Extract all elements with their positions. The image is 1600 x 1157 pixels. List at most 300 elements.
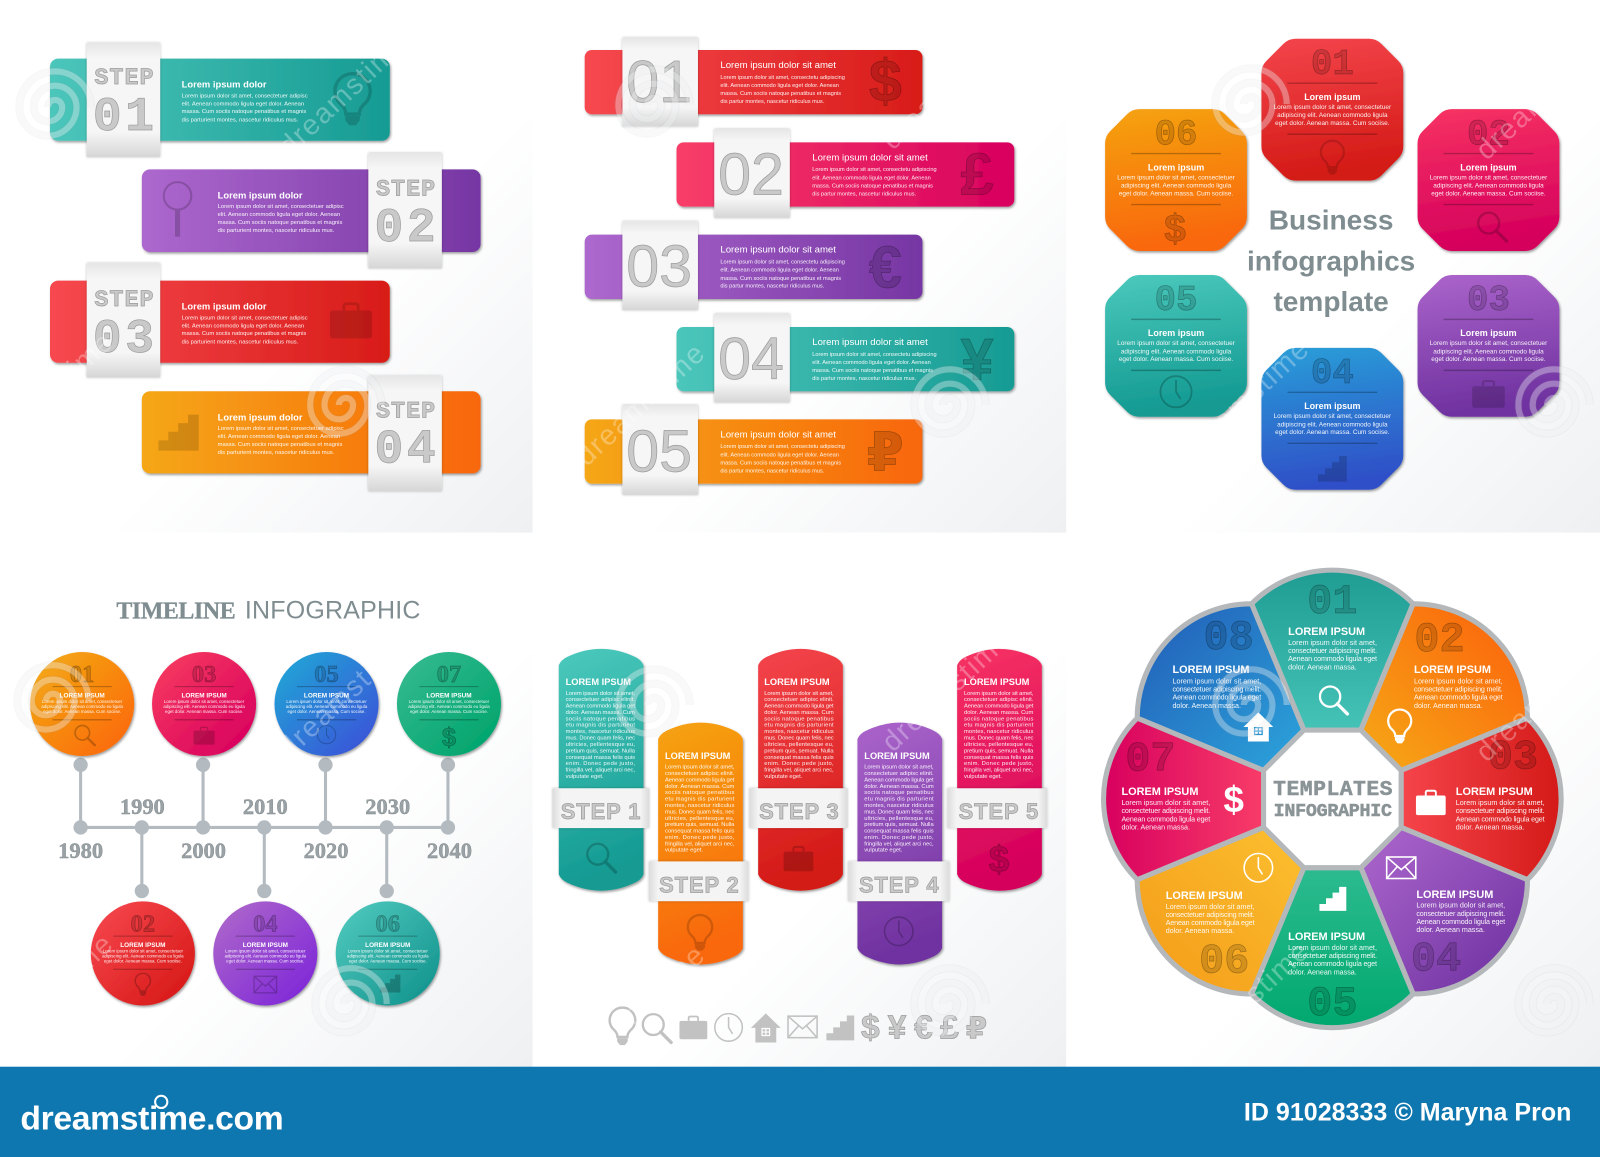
body text: etu magnis dis parturient (764, 723, 834, 729)
body text: Lorem ipsum dolor sit amet, (665, 765, 735, 771)
icon: bulb (688, 915, 712, 951)
year labels: 2030 (365, 794, 410, 819)
icon: house (1244, 712, 1273, 742)
body text: adipiscing elit. Aenean commodo eu ligula (102, 954, 184, 959)
circle 07 (397, 652, 501, 756)
body text: Lorem ipsum dolor sit amet, (864, 765, 934, 771)
body text: Lorem ipsum dolor sit amet, (1414, 677, 1503, 685)
body text: sociis natoque penatibus (665, 790, 734, 796)
body text: dolor. Aenean massa. (1416, 926, 1485, 934)
title: Lorem ipsum dolor (182, 302, 267, 312)
watermark overlay: dreamstime (876, 21, 1017, 156)
band: step 04: STEP (376, 398, 435, 425)
octagon 01 (1261, 39, 1403, 181)
icon set row: € (914, 1010, 933, 1047)
body text: consequat massa felis quis (566, 755, 635, 761)
body text: eget dolor. Aenean massa. Cum sociise. (1431, 356, 1546, 363)
icon: clock (1244, 854, 1273, 882)
icon: magnifier (1478, 213, 1507, 241)
body text: mus. Donec quam felis, nec (665, 809, 734, 815)
body text: consectetuer adipisc elinit. (764, 697, 834, 703)
body text: adipiscing elit. Aenean commodo eu ligula (41, 704, 123, 709)
circle 01 (30, 652, 134, 756)
icon: stairs (380, 975, 400, 993)
body text: dolor. Aenean massa. (1288, 968, 1357, 976)
body text: Lorem ipsum dolor sit amet, consectetuer (1430, 174, 1548, 181)
banner: step 04 (142, 376, 481, 491)
wedge 05 (1252, 868, 1413, 1028)
icon: bulb (1388, 710, 1411, 743)
body text: consectetuer adipisc elinit. (665, 771, 735, 777)
body text: vulputate eget. (864, 848, 903, 854)
heading: timeline infographic (116, 596, 420, 624)
body text: massa. Cum sociis natoque penatibus et magnis (720, 461, 841, 467)
column step 2 (649, 723, 749, 964)
body text: Lorem ipsum dolor sit amet, consectetuer (409, 699, 490, 704)
body text: montes, nascetur ridiculus (864, 803, 934, 809)
number 04: 04 (253, 911, 278, 938)
band: step 03: STEP (94, 287, 154, 314)
center heading: templates infographic: INFOGRAPHIC (1274, 801, 1392, 822)
body text: dolor. Aenean massa. Cum (964, 710, 1034, 716)
body text: vulputate eget. (665, 848, 703, 854)
body text: Lorem ipsum dolor sit amet, (1416, 902, 1505, 910)
body text: adipiscing elit. Aenean commodo eu ligula (225, 954, 307, 959)
number 03: 03 (1467, 280, 1510, 321)
body text: dolor. Aenean massa. (1288, 663, 1357, 671)
body text: eget dolor. Aenean massa. Cum sociise. (226, 959, 304, 964)
body text: pretium quis, semuat. Nulla (964, 748, 1034, 754)
icon: magnifier (1320, 687, 1347, 714)
title: Lorem ipsum dolor sit amet (720, 429, 836, 440)
body text: enim. Donec pede justo, (864, 835, 934, 841)
body text: Aenean commodo ligula get (764, 704, 834, 710)
band: step 04 (368, 376, 442, 491)
band: step 02 (368, 153, 442, 268)
body text: massa. Cum sociis natoque penatibus et magnis (218, 442, 342, 448)
icon: dollar: $ (989, 838, 1009, 879)
body text: Lorem ipsum dolor sit amet, consectetuer adipisc (218, 204, 344, 210)
body text: fringilla vel, aliquet arci nec, (864, 841, 934, 847)
number 06: 06 (376, 911, 400, 938)
body text: enim. Donec pede justo, (665, 835, 735, 841)
title: LOREM IPSUM (566, 677, 631, 687)
center heading: templates infographic (1264, 730, 1401, 868)
body text: eget dolor. Aenean massa. Cum sociise. (104, 959, 182, 964)
number 03: 03 (192, 661, 216, 688)
title: Lorem ipsum (1304, 92, 1361, 102)
title: LOREM IPSUM (1172, 664, 1249, 676)
icon: dollar: $ (1164, 207, 1186, 250)
number 01: 01 (70, 661, 94, 688)
body text: consectetuer adipisc elinit. (566, 697, 635, 703)
icon: envelope (1387, 857, 1416, 879)
number 07: 07 (1125, 736, 1176, 784)
body text: ultricies, pellentesque eu, (964, 742, 1034, 748)
body text: dis parturient montes, nascetur ridiculus mus. (182, 117, 299, 123)
icon: briefcase (330, 304, 372, 338)
body text: consectetuer adipiscing melit. (1416, 910, 1505, 918)
octagon 05 (1105, 275, 1247, 417)
body text: montes, nascetur ridiculus (764, 729, 834, 735)
body text: Lorem ipsum dolor sit amet, consectetuer (103, 948, 184, 953)
body text: massa. Cum sociis natoque penatibus et magnis (182, 331, 306, 337)
circle 05 (274, 652, 379, 756)
number 05: 05 (1307, 980, 1357, 1028)
band: step 04: 04 (374, 424, 436, 478)
body text: montes, nascetur ridiculus (665, 803, 734, 809)
body text: pretium quis, semuat. Nulla (864, 822, 934, 828)
footer credit: ID 91028333 © Maryna Pron (1244, 1098, 1571, 1126)
body text: dis parturient montes, nascetur ridiculus mus. (218, 450, 335, 456)
column step 4 (848, 723, 949, 964)
band: step 01 (87, 43, 160, 157)
icon: envelope (254, 976, 277, 993)
number 05: 05 (314, 661, 339, 688)
icon set row (610, 1008, 987, 1047)
icon: stairs (1318, 456, 1347, 482)
year labels: 2010 (243, 794, 288, 819)
body text: pretium quis, semuat. Nulla (764, 748, 834, 754)
body text: Aenean commodo ligula get (964, 704, 1034, 710)
panel: petal wheel (1104, 570, 1561, 1028)
body text: Lorem ipsum dolor sit amet, consectetuer (1274, 413, 1392, 420)
icon: bulb (135, 973, 151, 996)
title: LOREM IPSUM (1456, 786, 1533, 798)
body text: consectetuer adipisc elinit. (964, 697, 1034, 703)
body text: Lorem ipsum dolor sit amet, consectetuer (286, 699, 367, 704)
icon: clock (885, 917, 913, 946)
title: Lorem ipsum dolor (218, 412, 303, 422)
band: STEP 1: STEP 1 (561, 799, 640, 824)
title: LOREM IPSUM (1288, 626, 1365, 638)
body text: fringilla vel, aliquet arci nec, (665, 841, 735, 847)
title: LOREM IPSUM (426, 693, 472, 700)
title: LOREM IPSUM (1414, 664, 1491, 676)
band 05: 05 (626, 417, 692, 484)
body text: Lorem ipsum dolor sit amet, consectetu adipiscing (720, 260, 845, 266)
body text: massa. Cum sociis natoque penatibus et magnis (720, 91, 841, 97)
body text: Aenean commodo ligula get (566, 704, 635, 710)
body text: adipiscing elit. Aenean commodo eu ligula (347, 954, 429, 959)
body text: Lorem ipsum dolor sit amet, (764, 691, 834, 697)
band: step 02: STEP (376, 176, 435, 203)
title: LOREM IPSUM (864, 751, 930, 761)
heading: timeline infographic: TIMELINE (116, 598, 236, 624)
title: LOREM IPSUM (1166, 890, 1243, 902)
circle 06 (336, 901, 440, 1005)
body text: eget dolor. Aenean massa. Cum sociise. (165, 709, 243, 714)
body text: enim. Donec pede justo, (964, 761, 1034, 767)
body text: vulputate eget. (566, 774, 604, 780)
band 03 (622, 221, 698, 310)
body text: dolor. Aenean massa. (1456, 823, 1524, 831)
icon set row: £ (940, 1010, 959, 1047)
body text: sociis natoque penatibus (864, 790, 934, 796)
wedge 08 (1137, 604, 1304, 770)
number 07: 07 (437, 661, 461, 688)
band: step 01: STEP (94, 65, 154, 92)
octagon 04 (1261, 348, 1403, 490)
band: STEP 3: STEP 3 (759, 799, 839, 824)
body text: massa. Cum sociis natoque penatibus et magnis (720, 276, 841, 282)
title: LOREM IPSUM (304, 693, 349, 700)
body text: montes, nascetur ridiculus (964, 729, 1033, 735)
number 05: 05 (1155, 280, 1197, 321)
wedge 02 (1361, 604, 1527, 770)
wedge 01 (1252, 570, 1413, 730)
body text: enim. Donec pede justo, (764, 761, 834, 767)
title: Lorem ipsum dolor (218, 190, 303, 200)
panel: numbered banners with currency (585, 38, 1014, 495)
wedge 03 (1401, 718, 1561, 880)
year labels: 2000 (181, 838, 226, 863)
body text: consequat massa felis quis (665, 829, 734, 835)
body text: consectetuer adipiscing melit. (1166, 911, 1255, 919)
icon set row: ¥ (888, 1010, 907, 1047)
title: Lorem ipsum dolor sit amet (720, 60, 836, 71)
number 06: 06 (1155, 114, 1197, 155)
body text: eget dolor. Aenean massa. Cum sociise. (287, 709, 366, 714)
title: Lorem ipsum (1304, 401, 1361, 411)
title: Lorem ipsum (1460, 328, 1517, 338)
body text: adipiscing elit. Aenean commodo ligula (1433, 183, 1544, 190)
title: LOREM IPSUM (243, 942, 288, 949)
body text: adipiscing elit. Aenean commodo ligula (1433, 348, 1544, 355)
number 02: 02 (1467, 114, 1510, 155)
body text: etu magnis dis parturient (964, 723, 1034, 729)
body text: etu magnis dis parturient (864, 797, 934, 803)
body text: Lorem ipsum dolor sit amet, (566, 691, 635, 697)
wedge 06 (1137, 827, 1304, 994)
band: STEP 2: STEP 2 (659, 873, 739, 898)
body text: fringilla vel, aliquet arci nec, (964, 768, 1034, 774)
title: LOREM IPSUM (120, 942, 165, 949)
band: step 01: 01 (93, 91, 154, 145)
title: Lorem ipsum (1460, 162, 1517, 172)
body text: ultricies, pellentesque eu, (665, 816, 735, 822)
band 04 (714, 314, 790, 403)
band: STEP 2 (649, 861, 749, 901)
body text: etu magnis dis parturient (665, 797, 735, 803)
body text: eget dolor. Aenean massa. Cum sociise. (349, 959, 427, 964)
icon: clock (317, 725, 336, 744)
column step 1 (553, 649, 649, 891)
year labels: 1990 (120, 794, 165, 819)
heading: timeline infographic: INFOGRAPHIC (245, 596, 420, 624)
body text: Lorem ipsum dolor sit amet, consectetuer (1430, 340, 1548, 347)
body text: dis partur montes, nascetur ridiculus mus. (720, 468, 825, 474)
banner: step 02 (142, 153, 481, 268)
body text: consectetuer adipiscing melit. (1172, 685, 1261, 693)
body text: eget dolor. Aenean massa. Cum sociise. (1275, 120, 1390, 127)
number 02: 02 (1414, 616, 1465, 664)
body text: pretium quis, semuat. Nulla (665, 822, 735, 828)
body text: fringilla vel, aliquet arci nec, (764, 768, 834, 774)
icon: yen: ¥ (961, 326, 994, 393)
banner 03 (585, 221, 922, 310)
heading: business infographics template (1247, 205, 1415, 317)
band: STEP 5: STEP 5 (959, 799, 1038, 824)
body text: Lorem ipsum dolor sit amet, consectetuer (348, 948, 428, 953)
icon: stairs (1319, 887, 1346, 911)
body text: elit. Aenean commodo ligula eget dolor. Aenean (218, 212, 340, 218)
banner 05 (585, 405, 922, 495)
body text: dolor. Aenean massa. (1172, 702, 1241, 710)
watermark overlay: dreamstime (1174, 334, 1315, 468)
title: Lorem ipsum dolor sit amet (812, 337, 928, 348)
body text: adipiscing elit. Aenean commodo ligula (1277, 421, 1388, 428)
body text: dolor. Aenean massa. (1414, 702, 1483, 710)
band 03: 03 (626, 233, 692, 300)
number 06: 06 (1199, 937, 1249, 985)
band 04: 04 (718, 325, 784, 392)
year labels: 2040 (427, 838, 472, 863)
body text: dis partur montes, nascetur ridiculus mus. (812, 191, 917, 197)
body text: eget dolor. Aenean massa. Cum sociise. (1431, 190, 1546, 197)
icon: dollar: $ (442, 724, 456, 752)
body text: montes, nascetur ridiculus (566, 729, 635, 735)
body text: elit. Aenean commodo ligula eget dolor. Aenean (218, 434, 340, 440)
body text: dolor. Aenean massa. Cum (665, 784, 735, 790)
body text: eget dolor. Aenean massa. Cum sociise. (1119, 190, 1233, 197)
body text: ultricies, pellentesque eu, (864, 816, 934, 822)
body text: fringilla vel, aliquet arci nec, (566, 768, 635, 774)
column step 5 (947, 649, 1047, 891)
body text: dolor. Aenean massa. (1166, 927, 1234, 935)
watermark overlay: dreamstime (273, 28, 414, 162)
body text: pretium quis, semuat. Nulla (566, 748, 636, 754)
body text: consectetuer adipiscing melit. (1456, 807, 1545, 815)
body text: massa. Cum sociis natoque penatibus et magnis (812, 184, 933, 190)
icon: clock (1160, 376, 1192, 407)
wedge 07 (1104, 718, 1264, 880)
banner 02 (677, 129, 1014, 218)
body text: sociis natoque penatibus (764, 716, 834, 722)
banner 01 (585, 38, 922, 127)
number 04: 04 (1411, 936, 1461, 984)
body text: consectetuer adipisc elinit. (864, 771, 934, 777)
body text: Lorem ipsum dolor sit amet, (964, 691, 1034, 697)
title: LOREM IPSUM (1416, 889, 1493, 901)
watermark overlay: dreamstime (876, 623, 1017, 758)
icon: bulb (335, 74, 370, 125)
body text: dolor. Aenean massa. Cum (566, 710, 635, 716)
number 02: 02 (131, 911, 155, 938)
icon: briefcase (194, 727, 215, 745)
title: LOREM IPSUM (1121, 786, 1198, 798)
body text: Lorem ipsum dolor sit amet, consectetu adipiscing (720, 75, 845, 81)
body text: Lorem ipsum dolor sit amet, (1166, 903, 1255, 911)
band: STEP 4: STEP 4 (859, 873, 939, 898)
footer logo: dreamstime.com (20, 1100, 284, 1137)
panel: step banners (50, 43, 481, 491)
octagon 02 (1418, 109, 1559, 251)
watermark overlay: dreamstime (570, 940, 711, 1074)
body text: Aenean commodo ligula get (665, 777, 735, 783)
body text: Aenean commodo ligula eget (1414, 694, 1503, 702)
body text: massa. Cum sociis natoque penatibus et magnis (218, 220, 342, 226)
body text: elit. Aenean commodo ligula eget dolor. Aenean (720, 452, 839, 458)
body text: Lorem ipsum dolor sit amet, consectetu adipiscing (812, 167, 937, 173)
body text: adipiscing elit. Aenean commodo ligula (1121, 183, 1232, 190)
body text: Aenean commodo ligula eget (1456, 815, 1545, 823)
title: LOREM IPSUM (365, 942, 410, 949)
circle 03 (152, 652, 256, 756)
body text: Lorem ipsum dolor sit amet, consectetuer (225, 948, 306, 953)
band 02: 02 (718, 140, 784, 207)
body text: dis partur montes, nascetur ridiculus mus. (812, 376, 917, 382)
body text: Aenean commodo ligula eget (1416, 918, 1505, 926)
circle 02 (91, 901, 195, 1005)
body text: Lorem ipsum dolor sit amet, consectetuer (1117, 174, 1236, 181)
body text: Lorem ipsum dolor sit amet, (1456, 799, 1545, 807)
number 01: 01 (1307, 578, 1357, 626)
panel: timeline (30, 596, 501, 1005)
body text: Lorem ipsum dolor sit amet, (1288, 639, 1377, 647)
body text: massa. Cum sociis natoque penatibus et magnis (182, 109, 306, 115)
body text: mus. Donec quam felis, nec (566, 736, 635, 742)
watermark overlay: dreamstime (273, 629, 414, 764)
icon: magnifier (164, 182, 191, 237)
body text: massa. Cum sociis natoque penatibus et magnis (812, 368, 933, 374)
icon: dollar: $ (1223, 779, 1244, 820)
band: STEP 4 (848, 861, 949, 901)
band: STEP 1 (553, 788, 649, 828)
title: Lorem ipsum (1148, 162, 1204, 172)
body text: Aenean commodo ligula eget (1121, 815, 1210, 823)
body text: consectetuer adipiscing melit. (1288, 952, 1377, 960)
body text: dolor. Aenean massa. Cum (864, 784, 934, 790)
body text: Lorem ipsum dolor sit amet, (1172, 677, 1261, 685)
heading: business infographics template: Business (1269, 205, 1393, 236)
body text: Aenean commodo ligula eget (1166, 919, 1255, 927)
band: STEP 5 (947, 788, 1047, 828)
body text: dolor. Aenean massa. (1121, 823, 1190, 831)
body text: sociis natoque penatibus (964, 716, 1033, 722)
band: step 03 (87, 263, 160, 378)
icon: stairs (158, 415, 199, 451)
body text: Lorem ipsum dolor sit amet, consectetu adipiscing (720, 444, 845, 450)
body text: dis partur montes, nascetur ridiculus mus. (720, 284, 825, 290)
body text: Lorem ipsum dolor sit amet, consectetuer adipisc (182, 93, 308, 99)
body text: consectetuer adipiscing melit. (1121, 807, 1210, 815)
body text: consectetuer adipiscing melit. (1288, 647, 1377, 655)
body text: Lorem ipsum dolor sit amet, consectetuer (1117, 340, 1236, 347)
icon set row: $ (861, 1010, 880, 1047)
body text: consectetuer adipiscing melit. (1414, 685, 1503, 693)
body text: Aenean commodo ligula eget (1172, 694, 1261, 702)
body text: Aenean commodo ligula eget (1288, 655, 1377, 663)
wedge 04 (1361, 827, 1527, 994)
body text: Aenean commodo ligula eget (1288, 960, 1377, 968)
body text: elit. Aenean commodo ligula eget dolor. Aenean (182, 323, 304, 329)
title: LOREM IPSUM (964, 677, 1030, 687)
body text: dis parturient montes, nascetur ridiculus mus. (182, 339, 299, 345)
icon: magnifier (587, 844, 616, 872)
title: Lorem ipsum (1148, 328, 1204, 338)
icon: pound: £ (961, 140, 994, 207)
icon: euro: € (869, 234, 902, 301)
body text: enim. Donec pede justo, (566, 761, 635, 767)
icon: briefcase (1472, 381, 1505, 408)
body text: Lorem ipsum dolor sit amet, (1121, 799, 1210, 807)
body text: consequat massa felis quis (864, 829, 934, 835)
octagon 03 (1418, 275, 1559, 417)
band 01 (622, 38, 698, 127)
icon: briefcase (784, 847, 813, 871)
body text: mus. Donec quam felis, nec (864, 809, 934, 815)
